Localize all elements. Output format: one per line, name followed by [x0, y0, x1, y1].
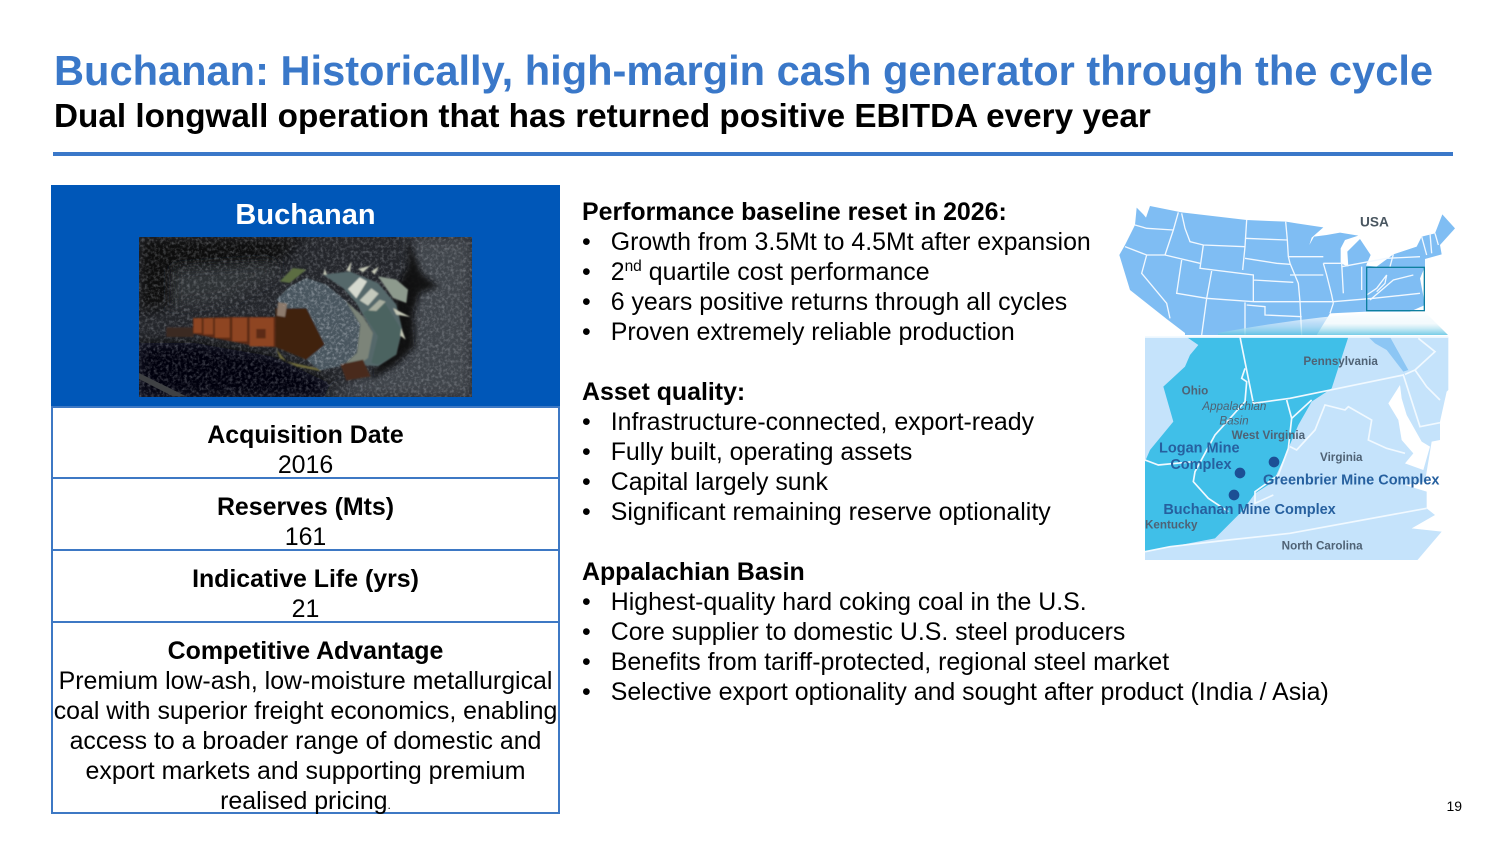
shadow behind cutter [370, 240, 438, 380]
text block: asset quality [582, 378, 1051, 526]
text block: Appalachian Basin [582, 558, 1329, 706]
state labels: Ohio [1182, 384, 1208, 397]
USA map [1119, 206, 1455, 335]
text block: Appalachian Basin: • Selective export optionality and sought after product (India / Asia) [582, 678, 1329, 706]
state labels: Virginia [1320, 451, 1363, 464]
text block: performance baseline: • 2nd quartile cost performance [582, 258, 930, 286]
row: indicative life value: 21 [292, 595, 319, 623]
row: competitive advantage text: export markets and supporting premium [86, 757, 525, 785]
row: reserves label: Reserves (Mts) [217, 493, 394, 521]
text block: asset quality: Asset quality: [582, 378, 745, 406]
arm tail [166, 327, 194, 337]
rust arm [193, 317, 276, 347]
row divider lines [51, 406, 560, 623]
mine location markers [1229, 457, 1279, 500]
text block: Appalachian Basin: • Highest-quality hard coking coal in the U.S. [582, 588, 1087, 616]
text block: asset quality: • Infrastructure-connected, export-ready [582, 408, 1034, 436]
state labels: Pennsylvania [1303, 355, 1378, 368]
table frame [51, 185, 560, 814]
text block: Appalachian Basin: • Core supplier to domestic U.S. steel producers [582, 618, 1125, 646]
cap coal texture [277, 278, 360, 370]
map: USA overview and Appalachian detail [1119, 206, 1455, 560]
lower rust bracket [340, 360, 370, 380]
state labels: North Carolina [1282, 539, 1363, 552]
row: reserves value: 161 [285, 523, 326, 551]
mine complex labels: Complex [1170, 457, 1232, 473]
row: competitive advantage text: Premium low-ash, low-moisture metallurgical [59, 667, 552, 695]
basin label: Basin [1219, 414, 1249, 427]
Appalachian Basin shaded region [1145, 337, 1348, 552]
title: Buchanan: Historically, high-margin cash generator through the cycle [54, 47, 1433, 94]
text block: Appalachian Basin: Appalachian Basin [582, 558, 805, 586]
text block: asset quality: • Significant remaining reserve optionality [582, 498, 1051, 526]
text block: performance baseline [582, 198, 1091, 346]
row: competitive advantage text: access to a broader range of domestic and [70, 727, 541, 755]
rail [139, 373, 186, 396]
row: acquisition date label: Acquisition Date [207, 421, 404, 449]
panel: Buchanan asset table [51, 408, 560, 814]
table heading: Buchanan [235, 199, 376, 231]
basin label: Appalachian [1201, 400, 1266, 413]
row: competitive advantage text [54, 667, 557, 815]
base land [1145, 337, 1448, 560]
projection wedge [1218, 312, 1448, 335]
row: indicative life label: Indicative Life (yrs) [192, 565, 419, 593]
text block: performance baseline: • 6 years positive returns through all cycles [582, 288, 1067, 316]
mine complex labels [1159, 441, 1439, 518]
coastline water [1405, 388, 1450, 561]
mine complex labels: Logan Mine [1159, 441, 1240, 457]
text block: performance baseline: • Growth from 3.5Mt to 4.5Mt after expansion [582, 228, 1091, 256]
inset locator box [1367, 267, 1424, 311]
photo: longwall shearer in coal seam [139, 237, 472, 397]
basin label [1201, 400, 1266, 427]
table header band [51, 185, 560, 407]
state labels [1145, 355, 1378, 552]
text block: Appalachian Basin: • Benefits from tariff-protected, regional steel market [582, 648, 1169, 676]
row: competitive advantage text: realised pricing. [220, 787, 391, 815]
mine complex labels: Buchanan Mine Complex [1163, 502, 1336, 518]
text block: asset quality: • Capital largely sunk [582, 468, 828, 496]
USA label: USA [1360, 214, 1389, 229]
text block: performance baseline: • Proven extremely reliable production [582, 318, 1015, 346]
green patch [280, 268, 306, 283]
state labels: West Virginia [1232, 429, 1306, 442]
text block: performance baseline: Performance baseline reset in 2026: [582, 198, 1007, 226]
page number: 19 [1446, 798, 1462, 814]
subtitle: Dual longwall operation that has returned positive EBITDA every year [54, 98, 1151, 135]
row: competitive advantage text: coal with superior freight economics, enabling [54, 697, 557, 725]
mine complex labels: Greenbrier Mine Complex [1263, 472, 1439, 488]
Appalachian detail map [1145, 337, 1450, 561]
header rule [53, 152, 1453, 156]
row: competitive advantage label: Competitive Advantage [168, 637, 443, 665]
state labels: Kentucky [1145, 519, 1198, 532]
text block: asset quality: • Fully built, operating assets [582, 438, 912, 466]
Chesapeake Bay [1388, 385, 1430, 470]
brown hub [276, 308, 326, 360]
row: acquisition date value: 2016 [278, 451, 333, 479]
cutting drum [323, 271, 402, 366]
coal-caked cap [276, 278, 360, 370]
